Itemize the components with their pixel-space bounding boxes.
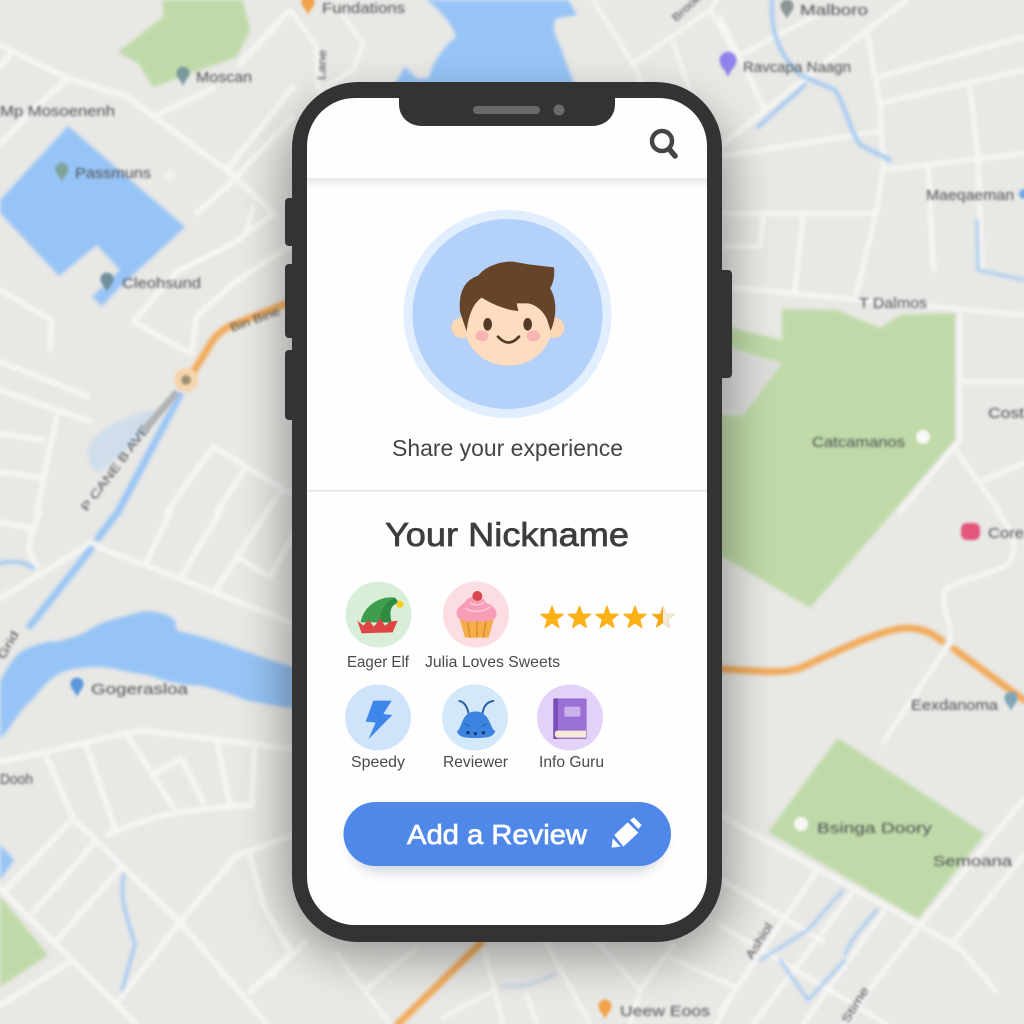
map labels: Gogerasloa <box>91 681 189 698</box>
badge: Speedy: Speedy <box>351 754 405 771</box>
road junction marker <box>146 368 198 428</box>
map labels: Eexdanoma <box>911 697 999 714</box>
star rating <box>541 606 674 628</box>
map labels: Passmuns <box>75 165 151 182</box>
map labels: Semoana <box>933 853 1013 870</box>
notch <box>399 96 615 126</box>
add a review button: Add a Review <box>407 819 588 850</box>
map labels: Lane <box>316 50 329 80</box>
add a review button <box>344 802 671 866</box>
divider <box>307 490 707 492</box>
badge: Eager Elf: Eager Elf <box>347 654 410 671</box>
badge: Info Guru: Info Guru <box>539 754 604 771</box>
orange highways <box>192 300 1024 1024</box>
map labels: Maeqaeman <box>926 187 1014 204</box>
map labels: Dooh <box>0 771 33 788</box>
badge: Julia Loves Sweets: Julia Loves Sweets <box>425 654 560 671</box>
badge: Eager Elf <box>346 582 412 671</box>
icon: search <box>652 131 675 156</box>
badge: Info Guru <box>537 684 604 771</box>
badge: Reviewer <box>442 684 509 771</box>
avatar <box>404 210 612 418</box>
side buttons <box>285 198 732 420</box>
badge: Speedy <box>345 684 411 771</box>
phone body <box>292 82 722 942</box>
map labels: Bsinga Doory <box>817 820 933 837</box>
map labels: Core <box>988 525 1024 542</box>
map labels: Ueew Eoos <box>620 1003 710 1020</box>
map labels: P CANE B AVE <box>78 422 152 514</box>
map labels: Moscan <box>196 69 252 86</box>
phone drop shadow <box>282 100 732 960</box>
map labels: Fundations <box>322 0 405 17</box>
map labels: Ravcapa Naagn <box>743 59 851 76</box>
map labels: T Dalmos <box>859 295 927 312</box>
header shadow <box>307 178 707 190</box>
camera <box>554 104 564 116</box>
map labels: Bin Bine <box>228 304 282 335</box>
badge: Reviewer: Reviewer <box>443 754 509 771</box>
button shadow <box>350 812 664 872</box>
map labels: Cleohsund <box>122 275 201 292</box>
nickname heading: Your Nickname <box>385 516 629 553</box>
icon: pencil <box>612 817 642 848</box>
phone mockup <box>285 82 732 942</box>
badge: Julia Loves Sweets <box>425 582 560 671</box>
phone screen <box>307 98 707 925</box>
map labels: Catcamanos <box>812 434 905 451</box>
map labels: Cost <box>988 405 1024 422</box>
map labels: Mp Mosoenenh <box>0 103 115 120</box>
map labels: Malboro <box>800 2 868 19</box>
prompt text: Share your experience <box>392 435 623 461</box>
map labels: Ashiol <box>743 920 776 962</box>
speaker <box>473 106 540 114</box>
